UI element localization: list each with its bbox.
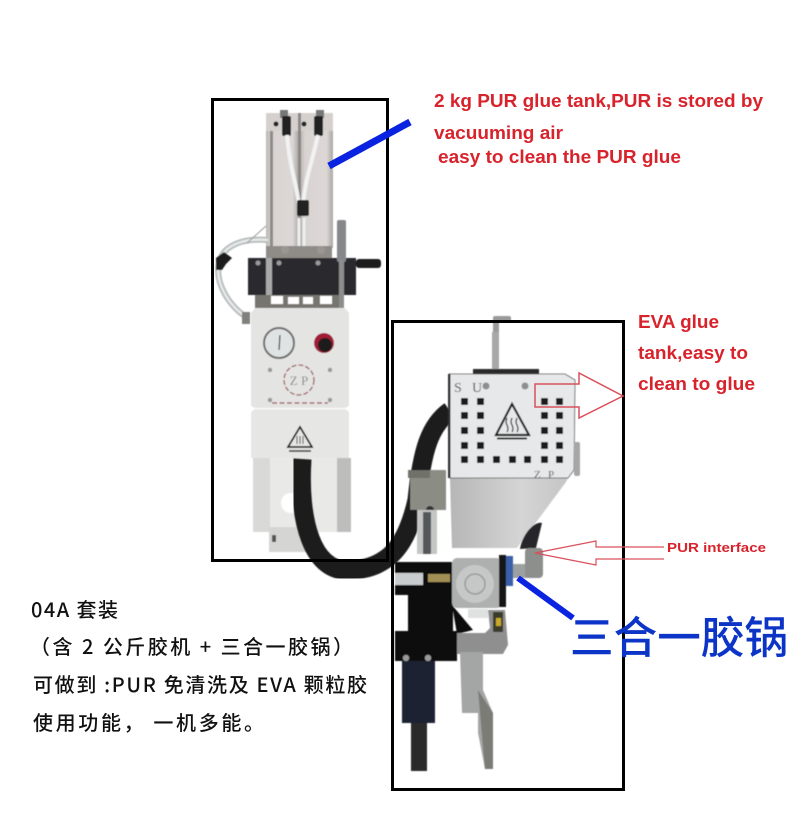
red outline arrow to PUR interface bbox=[535, 541, 664, 565]
black manifold block bbox=[248, 246, 356, 308]
air hoses bbox=[218, 226, 268, 316]
mounting bracket bbox=[253, 458, 351, 552]
PUR interface fitting bbox=[502, 523, 543, 586]
frame: left box bbox=[212, 100, 388, 560]
vent pipe bbox=[473, 316, 539, 375]
control housing bbox=[251, 308, 349, 408]
perforated top housing: Z bbox=[534, 469, 541, 481]
side glue gun valve bbox=[408, 470, 446, 554]
pressure gauge bbox=[264, 328, 294, 358]
hose connector bbox=[216, 252, 232, 270]
perforated top housing: P bbox=[548, 469, 554, 481]
black nozzle column bbox=[402, 661, 435, 771]
hopper lower body bbox=[450, 478, 568, 548]
description text block: 使用功能， 一机多能。 bbox=[33, 707, 264, 736]
perforated top housing: U bbox=[472, 381, 482, 396]
description text block bbox=[30, 594, 367, 736]
label: PUR glue tank bbox=[434, 91, 763, 167]
perforated top housing bbox=[448, 374, 580, 481]
label: PUR glue tank: easy to clean the PUR glue bbox=[438, 147, 681, 167]
label: PUR interface: PUR interface bbox=[667, 540, 766, 555]
perforated top housing: S bbox=[454, 381, 462, 396]
label: three-in-one glue pot: 三合一胶锅 bbox=[570, 602, 788, 666]
description text block: （含 2 公斤胶机 + 三合一胶锅） bbox=[30, 631, 353, 660]
label: EVA glue tank: EVA glue bbox=[638, 312, 719, 332]
description text block: 可做到 :PUR 免清洗及 EVA 颗粒胶 bbox=[33, 669, 367, 698]
blue pointer to glue pot bbox=[518, 578, 573, 618]
hose end fitting bbox=[242, 312, 250, 324]
black braided hose bbox=[301, 411, 450, 570]
label: EVA glue tank bbox=[638, 312, 755, 394]
label: EVA glue tank: clean to glue bbox=[638, 374, 755, 394]
gear pump bbox=[452, 555, 506, 618]
machine: three-in-one glue pot bbox=[395, 316, 580, 771]
black base block bbox=[395, 562, 473, 661]
heater housing with warning icon bbox=[251, 409, 349, 458]
red emergency button bbox=[314, 333, 334, 353]
pneumatic cylinders bbox=[266, 110, 333, 250]
heat warning icon bbox=[496, 404, 529, 438]
frame: right box bbox=[392, 322, 624, 790]
description text block: 04A 套装 bbox=[31, 594, 118, 623]
metal scraper plate bbox=[457, 610, 508, 769]
ZP logo: Z P bbox=[290, 373, 308, 388]
label: PUR glue tank: 2 kg PUR glue tank,PUR is stored by bbox=[434, 91, 763, 111]
label: PUR glue tank: vacuuming air bbox=[434, 123, 563, 143]
red outline arrow to EVA tank bbox=[535, 373, 623, 418]
label: EVA glue tank: tank,easy to bbox=[638, 343, 748, 363]
machine: PUR glue tank bbox=[216, 110, 381, 552]
handle bbox=[337, 220, 381, 308]
blue pointer to PUR tank bbox=[329, 122, 410, 166]
